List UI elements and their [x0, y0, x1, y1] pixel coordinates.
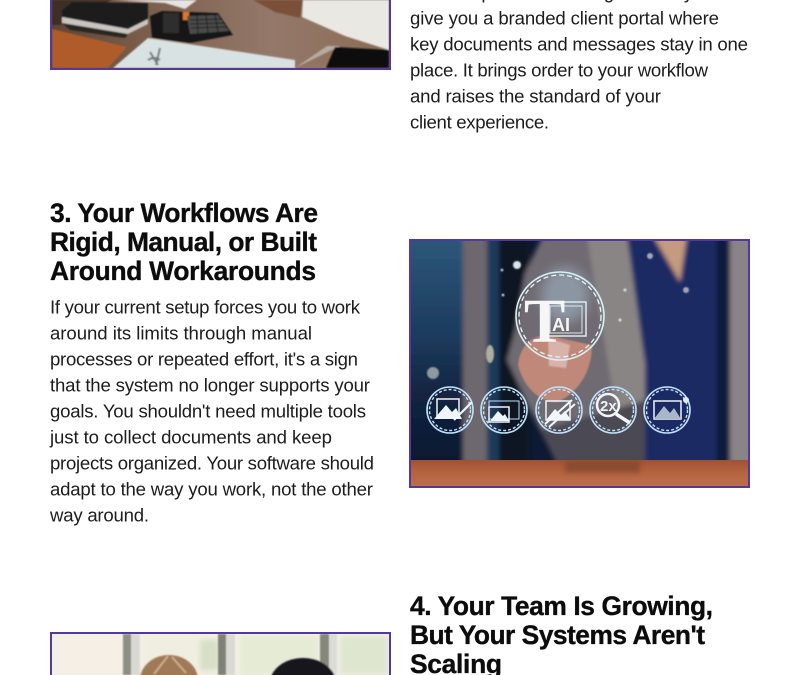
photo: two colleagues in front of a window — [51, 633, 390, 675]
text block: section 2 closing paragraph: place. It brings order to your workflow — [410, 60, 709, 80]
text block: section 3 paragraph: goals. You shouldn't need multiple tools — [50, 400, 366, 422]
table — [411, 460, 748, 486]
heading: section 4: 4. Your Team Is Growing, — [410, 591, 713, 621]
text block: section 2 closing paragraph: key documents and messages stay in one — [410, 34, 748, 54]
heading: section 3: Rigid, Manual, or Built — [50, 227, 317, 257]
text block: section 3 paragraph: adapt to the way you work, not the other — [50, 478, 373, 500]
text block: section 3 paragraph — [49, 296, 374, 526]
icon: AI hologram circle: AI — [552, 315, 570, 335]
heading: section 3 — [50, 198, 318, 286]
photo: desk with calculator and paperwork — [51, 0, 390, 69]
heading: section 3: 3. Your Workflows Are — [50, 198, 318, 228]
text block: section 2 closing paragraph: and raises the standard of your — [410, 86, 661, 106]
image border — [410, 240, 749, 487]
icons: five image tool circles: 2x — [600, 398, 617, 415]
text block: section 3 paragraph: around its limits through manual — [50, 322, 312, 344]
photo: hand touching AI hologram icons — [405, 236, 752, 487]
icon: AI hologram circle: T — [524, 288, 565, 356]
image border — [51, 633, 390, 675]
text block: section 3 paragraph: If your current setup forces you to work — [50, 296, 361, 318]
heading: section 4: But Your Systems Aren't — [410, 620, 705, 650]
text block: section 3 paragraph: way around. — [49, 504, 149, 526]
text block: section 3 paragraph: processes or repeated effort, it's a sign — [50, 348, 358, 370]
icon: AI hologram circle — [516, 267, 604, 360]
text block: section 2 closing paragraph — [410, 0, 748, 132]
text block: section 2 closing paragraph: client experience. — [410, 112, 549, 132]
text block: section 2 closing paragraph: give you a branded client portal where — [410, 8, 719, 28]
icons: five image tool circles — [427, 387, 690, 433]
text block: section 3 paragraph: that the system no longer supports your — [50, 374, 370, 396]
heading: section 4 — [410, 591, 713, 675]
image border — [51, 0, 390, 69]
text block: section 3 paragraph: just to collect documents and keep — [49, 426, 332, 448]
text block: section 3 paragraph: projects organized. Your software should — [50, 452, 374, 474]
heading: section 3: Around Workarounds — [50, 256, 316, 286]
